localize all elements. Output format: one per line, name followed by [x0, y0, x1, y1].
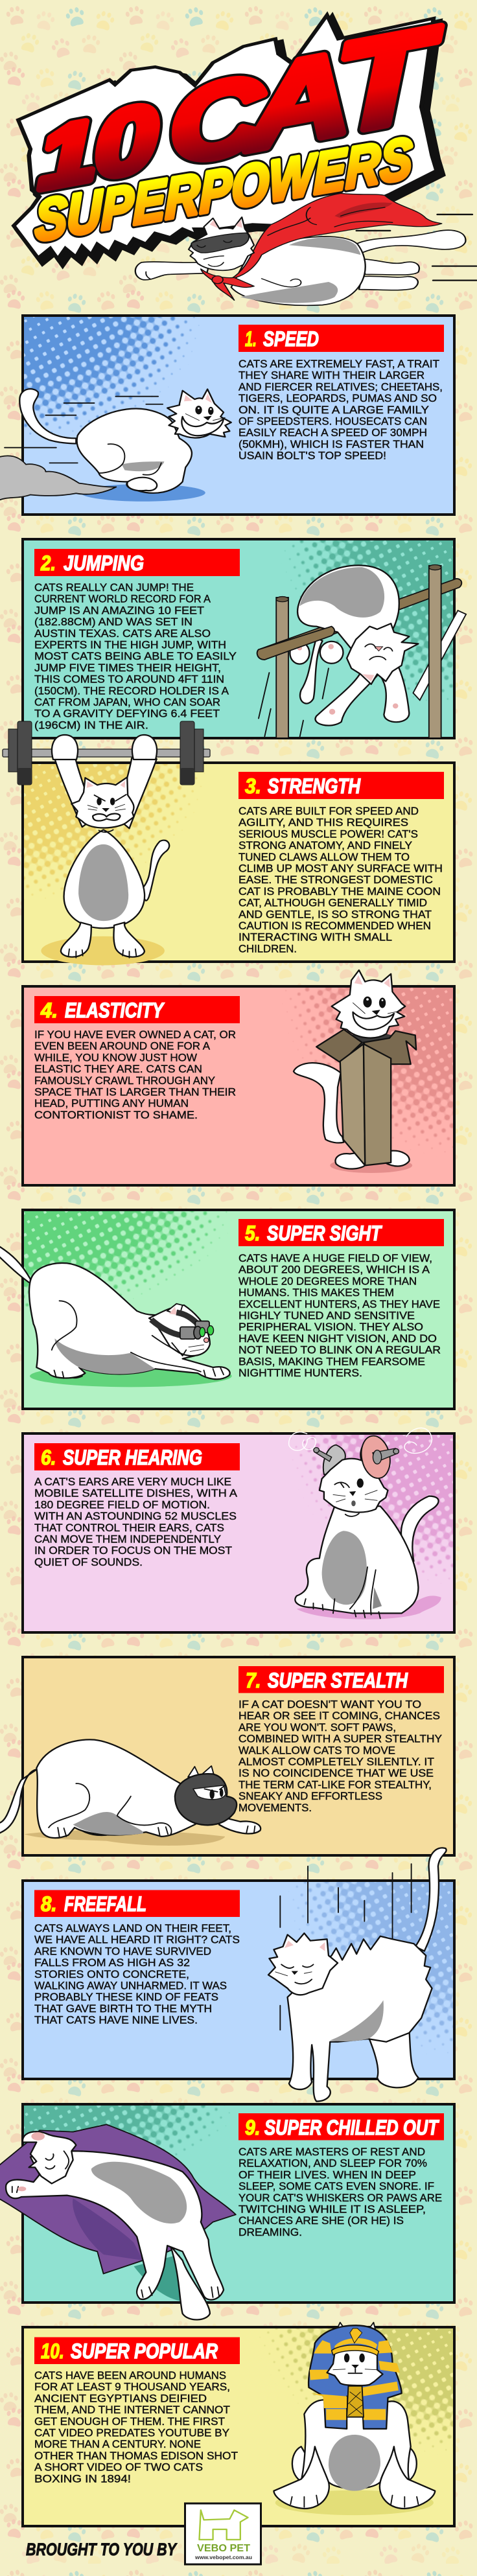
panel background	[23, 539, 454, 738]
body text: EASILY REACH A SPEED OF 30MPH	[238, 426, 427, 439]
body text: CAT, ALTHOUGH GENERALLY TIMID	[238, 897, 427, 909]
body text: AUSTIN TEXAS. CATS ARE ALSO	[34, 627, 211, 640]
body text: EXPERTS IN THE HIGH JUMP, WITH	[34, 639, 226, 651]
body text: TIGERS, LEOPARDS, PUMAS AND SO	[238, 392, 437, 404]
body text: CAT FROM JAPAN, WHO CAN SOAR	[34, 696, 220, 708]
body text: CATS ARE EXTREMELY FAST, A TRAIT	[238, 358, 439, 370]
heading text: SUPER SIGHT	[267, 1222, 382, 1245]
panel 8: freefall	[23, 1848, 454, 2102]
body text: ABOUT 200 DEGREES, WHICH IS A	[238, 1264, 430, 1276]
body text: EASE. THE STRONGEST DOMESTIC	[238, 874, 433, 886]
body text: JUMP IS AN AMAZING 10 FEET	[34, 604, 204, 616]
body text: FOR AT LEAST 9 THOUSAND YEARS,	[34, 2381, 230, 2393]
panel background	[23, 1657, 454, 1855]
body text: CONTORTIONIST TO SHAME.	[34, 1109, 198, 1121]
body text: HUMANS. THIS MAKES THEM	[238, 1286, 394, 1299]
body text: STORIES ONTO CONCRETE,	[34, 1968, 189, 1980]
heading bar	[34, 2337, 240, 2364]
heading text: 3.	[245, 774, 261, 798]
body text: (196CM) IN THE AIR.	[34, 719, 148, 731]
heading text: 10.	[41, 2339, 64, 2363]
body text: GET ENOUGH OF THEM. THE FIRST	[34, 2415, 225, 2428]
body text: CAT IS PROBABLY THE MAINE COON	[238, 885, 441, 898]
panel 4: elasticity	[23, 970, 454, 1185]
body text: OTHER THAN THOMAS EDISON SHOT	[34, 2450, 238, 2462]
body text: THAT CATS HAVE NINE LIVES.	[34, 2014, 198, 2026]
cape knot	[201, 269, 254, 300]
title burst outline	[14, 15, 441, 263]
body text: CURRENT WORLD RECORD FOR A	[34, 593, 211, 605]
body text: SPACE THAT IS LARGER THAN THEIR	[34, 1086, 236, 1098]
body text: SERIOUS MUSCLE POWER! CAT'S	[238, 828, 418, 840]
heading bar	[34, 1443, 240, 1470]
body text: CAN MOVE THEM INDEPENDENTLY	[34, 1533, 221, 1545]
body text: IF A CAT DOESN'T WANT YOU TO	[238, 1698, 421, 1711]
tail	[356, 230, 465, 253]
body text: RELAXATION, AND SLEEP FOR 70%	[238, 2157, 427, 2170]
sleeping cat on a blanket illustration	[0, 2124, 236, 2320]
body text: BOXING IN 1894!	[34, 2472, 131, 2485]
body text	[34, 1922, 240, 2026]
heading text: 5.	[245, 1222, 261, 1245]
body text: CATS REALLY CAN JUMP! THE	[34, 581, 194, 594]
body text	[238, 1252, 441, 1379]
halftone	[24, 2106, 453, 2301]
body text: SLEEP, SOME CATS EVEN SNORE. IF	[238, 2180, 434, 2192]
title text: 10 CAT: 10CAT	[36, 0, 444, 217]
back legs	[362, 259, 419, 275]
panel 10: super popular	[23, 2323, 454, 2526]
body text: TO A GRAVITY DEFYING 6.4 FEET	[34, 708, 220, 720]
body text: ARE KNOWN TO HAVE SURVIVED	[34, 1945, 211, 1957]
cat wearing night vision goggles illustration	[0, 1246, 232, 1387]
pharaoh sphinx cat illustration	[273, 2323, 435, 2515]
body text: OF SPEEDSTERS. HOUSECATS CAN	[238, 415, 427, 428]
body text: (182.88CM) AND WAS SET IN	[34, 616, 192, 628]
heading text	[41, 1892, 146, 1916]
body text: HAVE KEEN NIGHT VISION, AND DO	[238, 1332, 437, 1345]
title text: SUPERPOWERS: SUPERPOWERS	[35, 125, 412, 253]
falling cat illustration	[268, 1848, 447, 2102]
body text: TUNED CLAWS ALLOW THEM TO	[238, 851, 410, 863]
sponsor logo box	[185, 2503, 261, 2564]
body text: CHILDREN.	[238, 942, 297, 955]
body text: YOUR CAT'S WHISKERS OR PAWS ARE	[238, 2192, 442, 2204]
heading bar	[238, 1666, 444, 1693]
body text: THEY SHARE WITH THEIR LARGER	[238, 369, 425, 382]
halftone	[24, 1435, 453, 1631]
cape	[231, 193, 442, 279]
body text: (50KMH), WHICH IS FASTER THAN	[238, 438, 424, 450]
body text	[238, 2146, 442, 2238]
panel background	[23, 1433, 454, 1632]
body text: MOBILE SATELLITE DISHES, WITH A	[34, 1487, 238, 1500]
body text: A CAT'S EARS ARE VERY MUCH LIKE	[34, 1476, 231, 1488]
body text: WITH AN ASTOUNDING 52 MUSCLES	[34, 1510, 237, 1522]
body text: THAT GAVE BIRTH TO THE MYTH	[34, 2002, 212, 2015]
hero cat with red cape	[135, 193, 476, 305]
body text: CATS ARE BUILT FOR SPEED AND	[238, 805, 419, 817]
halftone	[24, 540, 453, 737]
heading text: STRENGTH	[268, 774, 361, 798]
halftone	[24, 317, 453, 513]
body text: COMBINED WITH A SUPER STEALTHY	[238, 1733, 442, 1745]
heading text: JUMPING	[64, 551, 144, 575]
body text: ON. IT IS QUITE A LARGE FAMILY	[238, 404, 429, 416]
arm	[135, 261, 210, 280]
body text: CAT VIDEO PREDATES YOUTUBE BY	[34, 2426, 229, 2439]
body text: ARE YOU WON'T. SOFT PAWS,	[238, 1721, 396, 1734]
heading text: SUPER POPULAR	[71, 2339, 218, 2363]
body text: USAIN BOLT'S TOP SPEED!	[238, 450, 386, 462]
body text: THIS COMES TO AROUND 4FT 11IN	[34, 673, 224, 686]
halftone	[24, 1882, 453, 2078]
heading text: SUPER HEARING	[63, 1446, 202, 1469]
panel 1: speed	[0, 316, 454, 515]
heading bar	[34, 549, 240, 576]
body text: AND FIERCER RELATIVES; CHEETAHS,	[238, 380, 443, 393]
body text: HEAD, PUTTING ANY HUMAN	[34, 1097, 189, 1109]
panel background	[23, 2327, 454, 2526]
title text: SUPERPOWERS: SUPERPOWERS	[35, 125, 412, 253]
dog logo	[199, 2510, 248, 2540]
speed lines	[356, 215, 476, 281]
body text: 180 DEGREE FIELD OF MOTION.	[34, 1498, 210, 1511]
heading text: SUPER CHILLED OUT	[264, 2116, 439, 2139]
body text: EVEN BEEN AROUND ONE FOR A	[34, 1040, 211, 1052]
body text: AGILITY, AND THIS REQUIRES	[238, 817, 408, 829]
title text: 10 CAT: 10CAT	[36, 0, 444, 217]
panel background	[23, 1881, 454, 2079]
panel background	[23, 1210, 454, 1409]
barbell	[3, 721, 210, 785]
body text: ANCIENT EGYPTIANS DEIFIED	[34, 2392, 207, 2404]
body text	[34, 1028, 236, 1121]
heading text: 6.	[41, 1446, 56, 1469]
heading text: FREEFALL	[64, 1892, 146, 1916]
halftone	[24, 764, 453, 960]
body text: CHANCES ARE SHE (OR HE) IS	[238, 2214, 404, 2227]
heading text: ELASTICITY	[65, 999, 165, 1022]
heading text: 4.	[40, 999, 58, 1022]
heading text	[40, 551, 144, 575]
head	[189, 217, 254, 270]
body text: WALKING AWAY UNHARMED. IT WAS	[34, 1979, 227, 1992]
panel 2: jumping	[23, 539, 466, 738]
body text: MORE THAN A CENTURY. NONE	[34, 2438, 201, 2450]
halftone	[24, 1211, 453, 1408]
body text: CATS HAVE A HUGE FIELD OF VIEW,	[238, 1252, 432, 1264]
body text: HIGHLY TUNED AND SENSITIVE	[238, 1309, 415, 1322]
body text: EXCELLENT HUNTERS, AS THEY HAVE	[238, 1298, 440, 1310]
panel 7: super stealth	[0, 1657, 454, 1855]
body text: WHILE, YOU KNOW JUST HOW	[34, 1051, 197, 1063]
body text	[238, 1698, 442, 1814]
panel 5: super sight	[0, 1210, 454, 1409]
heading bar	[34, 996, 240, 1023]
body text: CATS HAVE BEEN AROUND HUMANS	[34, 2369, 226, 2382]
body text: CAUTION IS RECOMMENDED WHEN	[238, 920, 431, 932]
body text: CATS ARE MASTERS OF REST AND	[238, 2146, 425, 2158]
body text: WE HAVE ALL HEARD IT RIGHT? CATS	[34, 1934, 240, 1946]
body text	[34, 581, 237, 731]
halftone	[24, 988, 453, 1184]
heading text	[245, 774, 361, 798]
body text: QUIET OF SOUNDS.	[34, 1556, 143, 1568]
body text: WALK ALLOW CATS TO MOVE	[238, 1744, 395, 1756]
body text: PERIPHERAL VISION. THEY ALSO	[238, 1321, 423, 1333]
heading text: SUPER STEALTH	[268, 1669, 408, 1692]
body text: CATS ALWAYS LAND ON THEIR FEET,	[34, 1922, 231, 1934]
heading text: 2.	[40, 551, 56, 575]
cat in a box illustration	[294, 970, 416, 1173]
title logo: 10 Cat Superpowers	[14, 0, 444, 263]
heading bar	[238, 1219, 444, 1246]
weightlifting cat illustration	[41, 740, 169, 965]
panel background	[23, 986, 454, 1185]
heading bar	[34, 1890, 240, 1917]
body text: STRONG ANATOMY, AND FINELY	[238, 839, 412, 852]
body text: THE TERM CAT-LIKE FOR STEALTHY,	[238, 1778, 432, 1791]
body text: MOST CATS BEING ABLE TO EASILY	[34, 650, 237, 662]
body text	[238, 358, 443, 462]
cat with satellite dish ears illustration	[289, 1428, 441, 1619]
body text: PROBABLY THESE KIND OF FEATS	[34, 1991, 218, 2003]
heading bar	[238, 2113, 444, 2140]
body text: THAT CONTROL THEIR EARS, CATS	[34, 1522, 224, 1534]
sponsor text: BROUGHT TO YOU BY	[26, 2540, 178, 2559]
body text: MOVEMENTS.	[238, 1802, 312, 1814]
body text: ELASTIC THEY ARE. CATS CAN	[34, 1063, 202, 1075]
panel background	[23, 2104, 454, 2303]
heading text	[245, 327, 319, 351]
logo url: www.vebopet.com.au	[194, 2554, 252, 2560]
running cat illustration	[0, 389, 231, 502]
body text: THEM, AND THE INTERNET CANNOT	[34, 2404, 230, 2416]
body text: SNEAKY AND EFFORTLESS	[238, 1790, 382, 1802]
body text: HEAR OR SEE IT COMING, CHANCES	[238, 1710, 440, 1722]
heading text: 9.	[245, 2116, 261, 2139]
body text: IF YOU HAVE EVER OWNED A CAT, OR	[34, 1028, 236, 1041]
heading bar	[238, 772, 444, 799]
sneaking ninja cat illustration	[0, 1739, 261, 1846]
heading text: 8.	[41, 1892, 57, 1916]
body	[231, 237, 366, 305]
halftone	[24, 2328, 453, 2525]
heading text	[40, 999, 165, 1022]
body text	[34, 1476, 238, 1568]
mask	[191, 233, 249, 253]
heading text: 7.	[246, 1669, 261, 1692]
heading bar	[238, 325, 444, 352]
cat clearing a hurdle illustration	[257, 564, 466, 738]
panel background	[23, 763, 454, 962]
heading text: SPEED	[263, 327, 319, 351]
body text: NOT NEED TO BLINK ON A REGULAR	[238, 1344, 441, 1356]
body text: A SHORT VIDEO OF TWO CATS	[34, 2461, 203, 2474]
body text: ALMOST COMPLETELY SILENTLY. IT	[238, 1756, 434, 1768]
body text: FAMOUSLY CRAWL THROUGH ANY	[34, 1074, 215, 1087]
body text: BASIS, MAKING THEM FEARSOME	[238, 1355, 425, 1367]
body text: AND GENTLE, IS SO STRONG THAT	[238, 908, 432, 920]
panel 3: strength	[3, 721, 454, 965]
body text: JUMP FIVE TIMES THEIR HEIGHT,	[34, 662, 221, 674]
heading text: 1.	[245, 327, 257, 351]
panel background	[23, 316, 454, 515]
body text: WHOLE 20 DEGREES MORE THAN	[238, 1275, 417, 1287]
logo wordmark: VEBO PET	[197, 2543, 250, 2554]
body text: CLIMB UP MOST ANY SURFACE WITH	[238, 862, 443, 875]
body text: (150CM). THE RECORD HOLDER IS A	[34, 684, 229, 697]
body text: TWITCHING WHILE IT IS ASLEEP,	[238, 2203, 426, 2215]
body text	[238, 805, 443, 955]
body text	[34, 2369, 238, 2485]
body text: OF THEIR LIVES. WHEN IN DEEP	[238, 2168, 416, 2181]
body text: IN ORDER TO FOCUS ON THE MOST	[34, 1544, 232, 1557]
body text: DREAMING.	[238, 2226, 302, 2238]
body text: FALLS FROM AS HIGH AS 32	[34, 1956, 190, 1969]
body text: IS NO COINCIDENCE THAT WE USE	[238, 1767, 434, 1780]
body text: INTERACTING WITH SMALL	[238, 931, 392, 944]
panel 9: super chilled out	[0, 2104, 454, 2320]
body text: NIGHTTIME HUNTERS.	[238, 1367, 362, 1379]
panel 6: super hearing	[23, 1428, 454, 1632]
